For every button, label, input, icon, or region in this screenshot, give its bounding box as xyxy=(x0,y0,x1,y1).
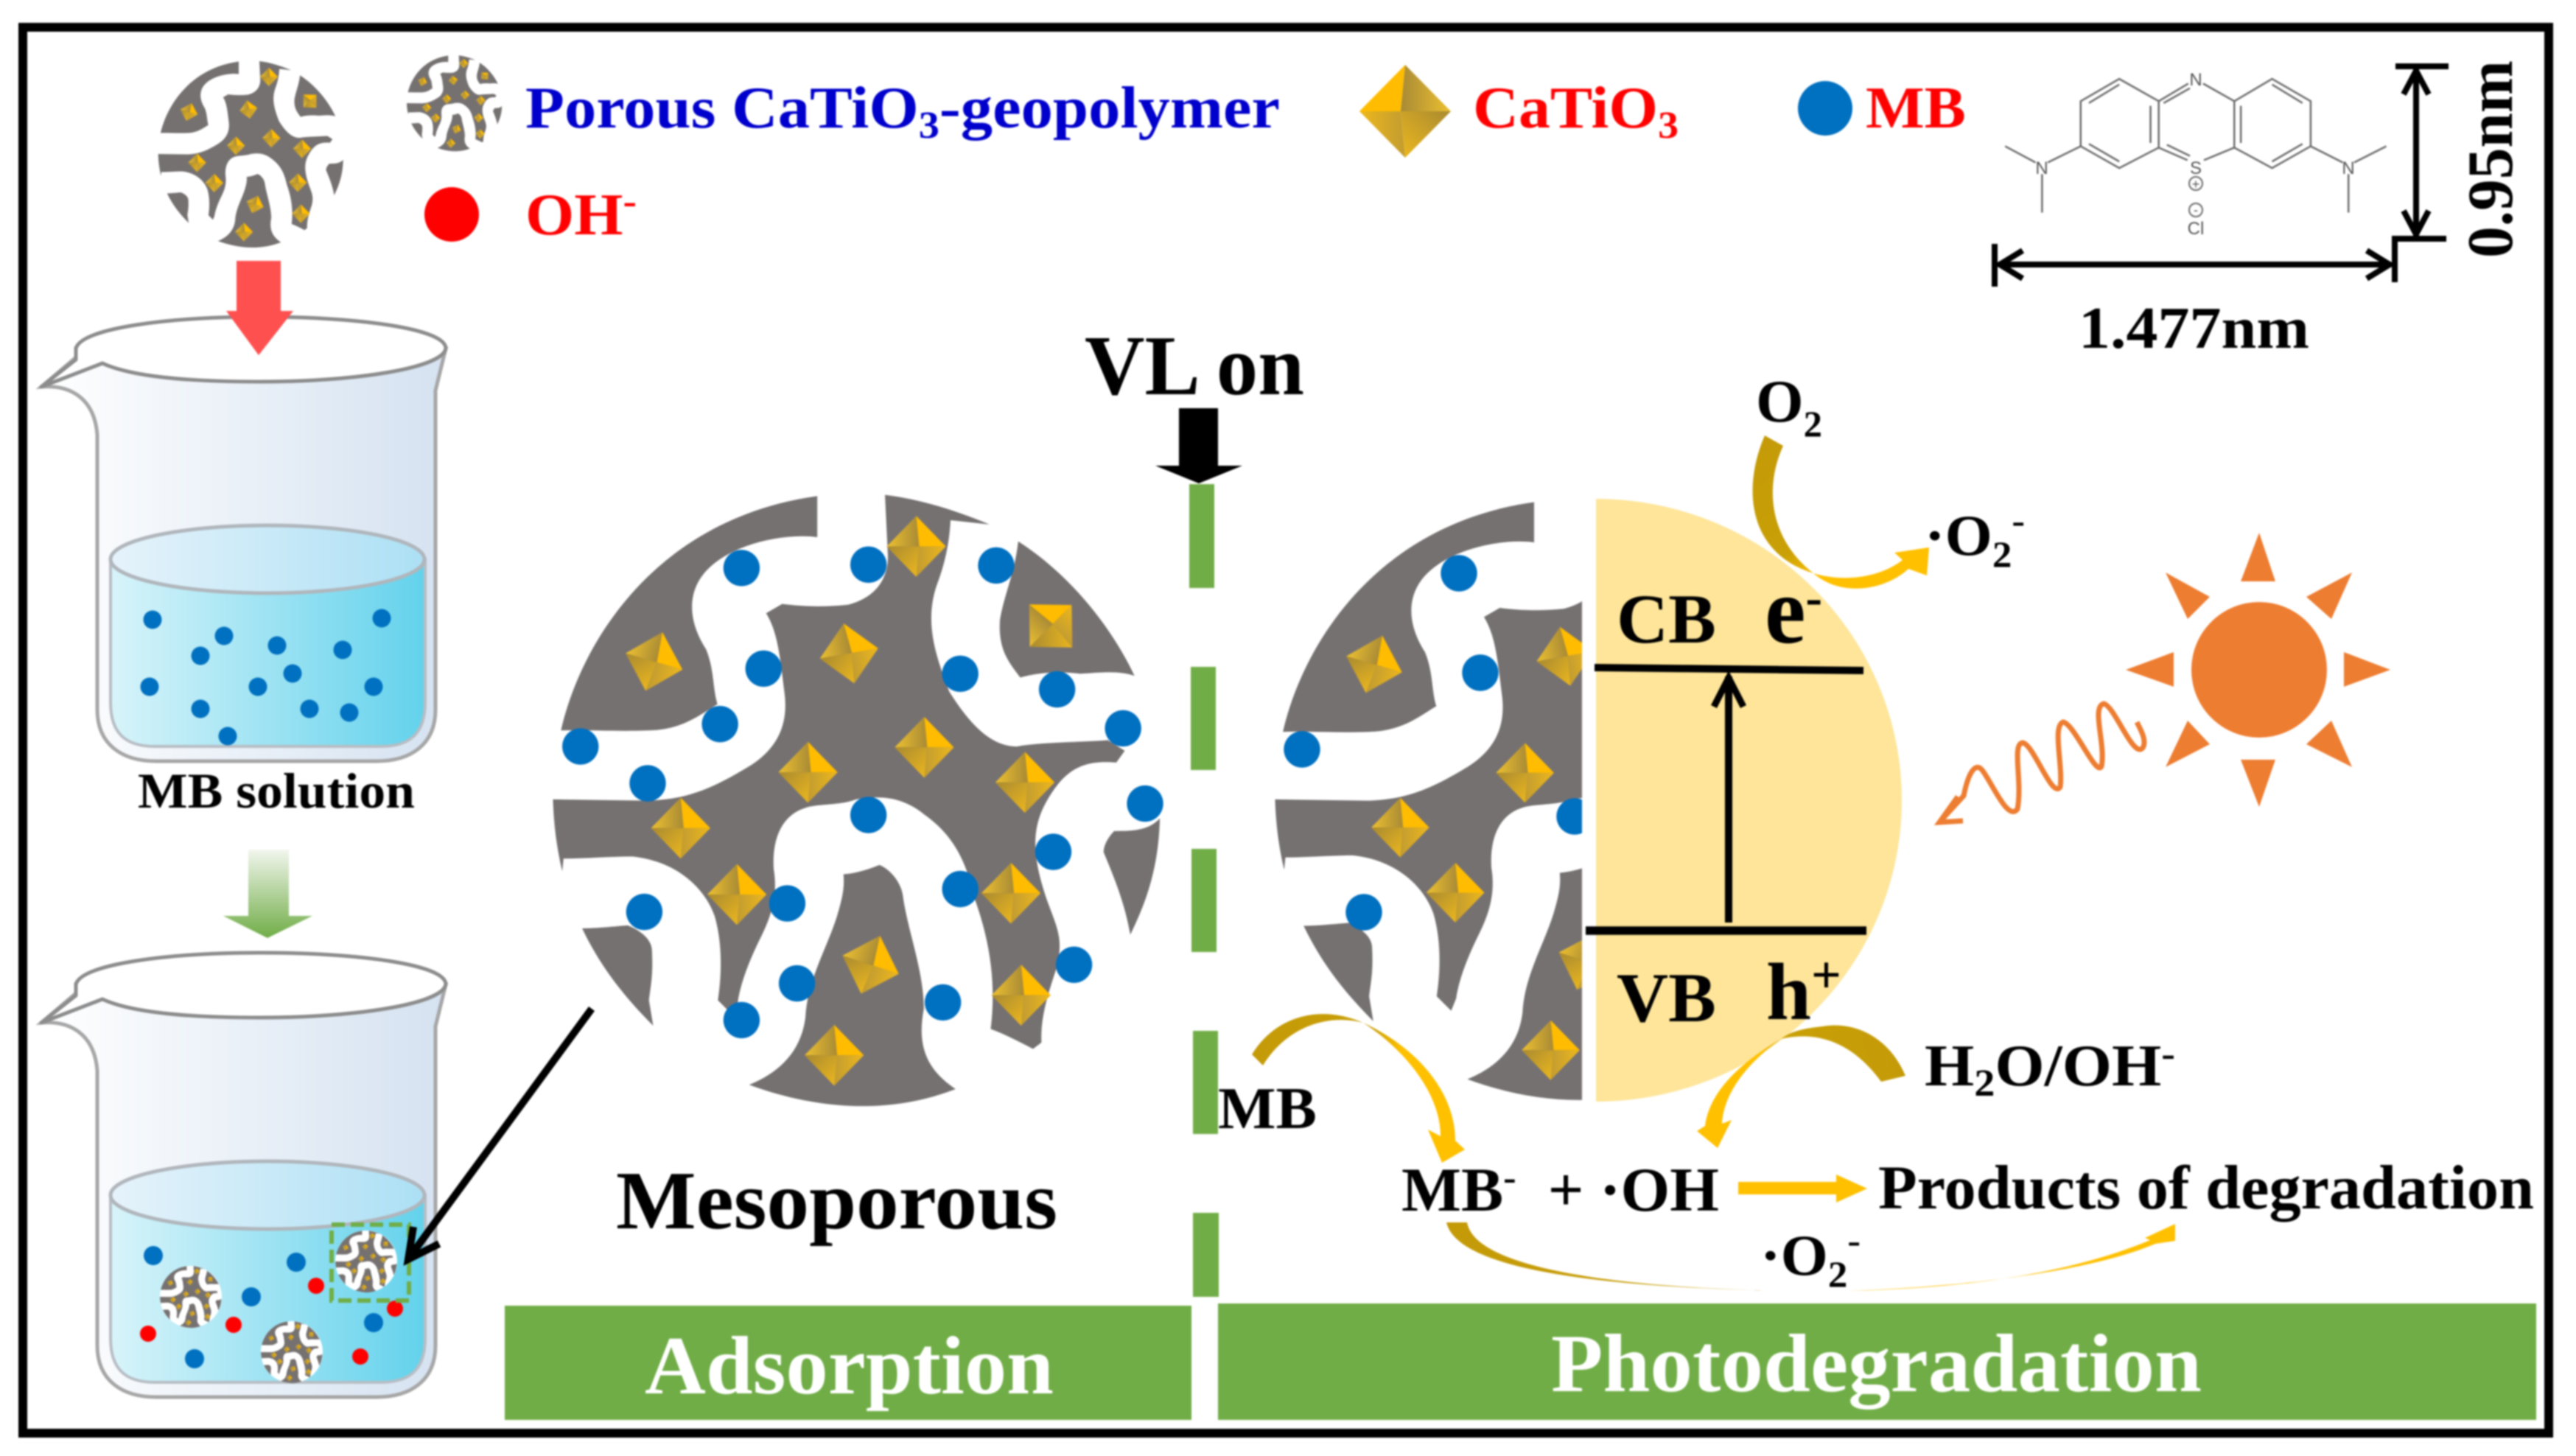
label: Mesoporous: Mesoporous xyxy=(616,1155,1057,1247)
label: MB- + ·OH: MB xyxy=(1401,1155,1502,1225)
label: hole: h xyxy=(1766,947,1811,1037)
banner: Adsorption: Adsorption xyxy=(645,1320,1054,1412)
arrow: green down arrow xyxy=(223,850,312,938)
arrow: add particle to beaker xyxy=(226,261,293,355)
molecule: methylene blue structure: + xyxy=(2192,177,2199,192)
label: electron: - xyxy=(1806,570,1822,626)
molecule: methylene blue structure: N xyxy=(2189,70,2202,90)
label: lower superoxide radical: 2 xyxy=(1828,1253,1847,1295)
icon: sun xyxy=(2126,533,2390,807)
legend icon: CaTiO3 crystal xyxy=(1359,65,1451,158)
label: H2O/OH-: O/OH xyxy=(1995,1034,2161,1099)
legend icon: MB dot xyxy=(1798,81,1852,136)
dimension arrows: molecule width and height xyxy=(1995,66,2449,287)
label: superoxide radical: ·O xyxy=(1925,503,1989,567)
label: MB solution: MB solution xyxy=(138,763,415,819)
legend label: CaTiO3: 3 xyxy=(1658,105,1679,147)
banner: Adsorption xyxy=(505,1306,1191,1420)
label: hole: + xyxy=(1811,945,1841,1004)
label: H2O/OH-: H xyxy=(1925,1034,1970,1099)
label: MB- + ·OH: - xyxy=(1503,1157,1516,1199)
legend label: Porous CaTiO3-geopolymer: 3 xyxy=(919,105,939,147)
molecule: methylene blue structure: N xyxy=(2342,158,2355,178)
molecule: methylene blue structure: - xyxy=(2194,203,2198,217)
legend label: Porous CaTiO3-geopolymer: -geopolymer xyxy=(939,76,1280,141)
dimension label: 1.477nm: 1.477nm xyxy=(2079,296,2309,361)
legend: porous particle above beaker xyxy=(158,61,343,248)
legend: porous CaTiO3-geopolymer icon xyxy=(407,55,502,151)
label: superoxide radical: - xyxy=(2012,500,2025,541)
arrow: to products xyxy=(1738,1175,1867,1203)
divider: green dashed line xyxy=(1189,484,1219,1297)
molecule: methylene blue structure: Cl xyxy=(2188,219,2204,239)
label: VB: VB xyxy=(1617,959,1716,1037)
molecule: methylene blue structure xyxy=(2005,70,2386,239)
label: electron: e xyxy=(1765,558,1807,664)
arrow: visible light on xyxy=(1155,408,1242,483)
arrow: O2 to superoxide xyxy=(1753,435,1929,589)
label: lower superoxide radical: - xyxy=(1847,1219,1861,1261)
molecule: methylene blue structure: N xyxy=(2035,158,2048,178)
label: lower superoxide radical: ·O xyxy=(1760,1223,1824,1287)
band diagram lines and excitation arrow xyxy=(1586,668,1866,931)
beaker: MB solution xyxy=(41,317,446,761)
semiconductor half disc xyxy=(1596,499,1902,1102)
label: O2: 2 xyxy=(1804,403,1822,444)
legend label: Porous CaTiO3-geopolymer: Porous CaTiO xyxy=(525,76,889,141)
label: Products of degradation: Products of degradation xyxy=(1878,1153,2534,1222)
legend label: OH-: OH xyxy=(525,183,617,248)
label: H2O/OH-: 2 xyxy=(1974,1063,1995,1105)
large mesoporous particle with adsorbed MB xyxy=(553,495,1163,1106)
label: MB reactant: MB xyxy=(1218,1077,1317,1141)
legend label: OH-: - xyxy=(623,181,637,223)
label: O2: O xyxy=(1756,368,1803,435)
arrow: lower curve via superoxide xyxy=(1446,1222,2175,1291)
heading: VL on: VL on xyxy=(1085,319,1304,413)
legend label: CaTiO3: CaTiO xyxy=(1473,76,1645,141)
beaker: with particles xyxy=(41,953,446,1397)
arrow: zoom from beaker to particle xyxy=(408,1009,592,1259)
half particle with adsorbed MB xyxy=(1274,501,1583,1101)
arrow: light wave xyxy=(1939,704,2144,822)
banner: Photodegradation: Photodegradation xyxy=(1551,1318,2202,1410)
label: superoxide radical: 2 xyxy=(1992,533,2012,575)
label: H2O/OH-: - xyxy=(2161,1033,2175,1075)
label: CB: CB xyxy=(1617,580,1716,658)
banner: Photodegradation xyxy=(1218,1303,2536,1420)
arrow: water to hydroxyl radical xyxy=(1697,1026,1905,1148)
legend icon: OH- dot xyxy=(424,187,479,242)
legend label: MB: MB xyxy=(1866,76,1966,141)
label: MB- + ·OH: + ·OH xyxy=(1516,1155,1719,1225)
molecule: methylene blue structure: S xyxy=(2190,158,2202,178)
arrow: MB to MB- xyxy=(1252,1014,1465,1163)
dimension label: 0.95nm: 0.95nm xyxy=(2455,60,2527,258)
